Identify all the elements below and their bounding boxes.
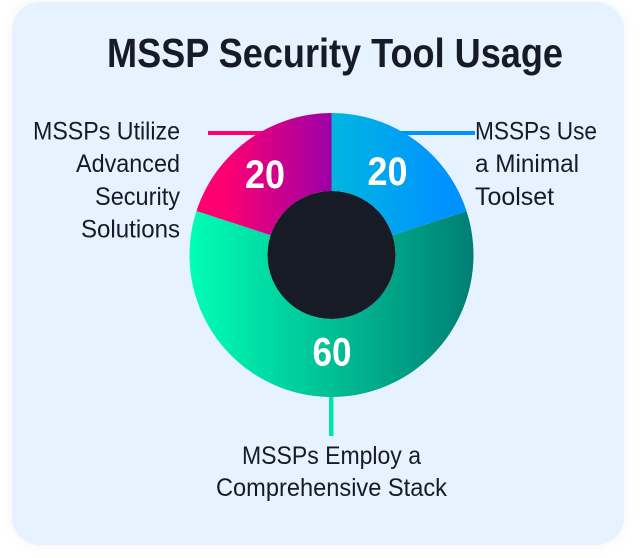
label: minimal toolset xyxy=(475,118,597,211)
label: minimal toolset: a Minimal xyxy=(475,150,579,178)
label: comprehensive stack xyxy=(216,442,447,502)
label: comprehensive stack: Comprehensive Stack xyxy=(216,474,447,502)
leader line: comprehensive stack xyxy=(329,390,334,436)
value: comprehensive stack: 60 xyxy=(312,330,352,374)
label: minimal toolset: Toolset xyxy=(475,183,554,211)
label: advanced solutions: MSSPs Utilize xyxy=(33,118,180,146)
label: minimal toolset: MSSPs Use xyxy=(475,118,597,146)
slice: comprehensive stack 60 xyxy=(189,211,473,397)
donut chart xyxy=(189,113,473,397)
value: advanced solutions: 20 xyxy=(245,153,285,197)
slice: advanced solutions 20 xyxy=(196,113,332,235)
leader line: advanced solutions xyxy=(208,131,268,135)
value: minimal toolset: 20 xyxy=(368,150,408,194)
donut centre xyxy=(268,191,396,319)
title: MSSP Security Tool Usage xyxy=(107,30,563,76)
label: comprehensive stack: MSSPs Employ a xyxy=(242,442,421,470)
slice: minimal toolset 20 xyxy=(332,113,467,235)
label: advanced solutions: Solutions xyxy=(81,216,180,244)
label: advanced solutions: Advanced xyxy=(76,150,180,178)
leader line: minimal toolset xyxy=(400,131,475,135)
label: advanced solutions: Security xyxy=(95,183,180,211)
label: advanced solutions xyxy=(33,118,180,244)
